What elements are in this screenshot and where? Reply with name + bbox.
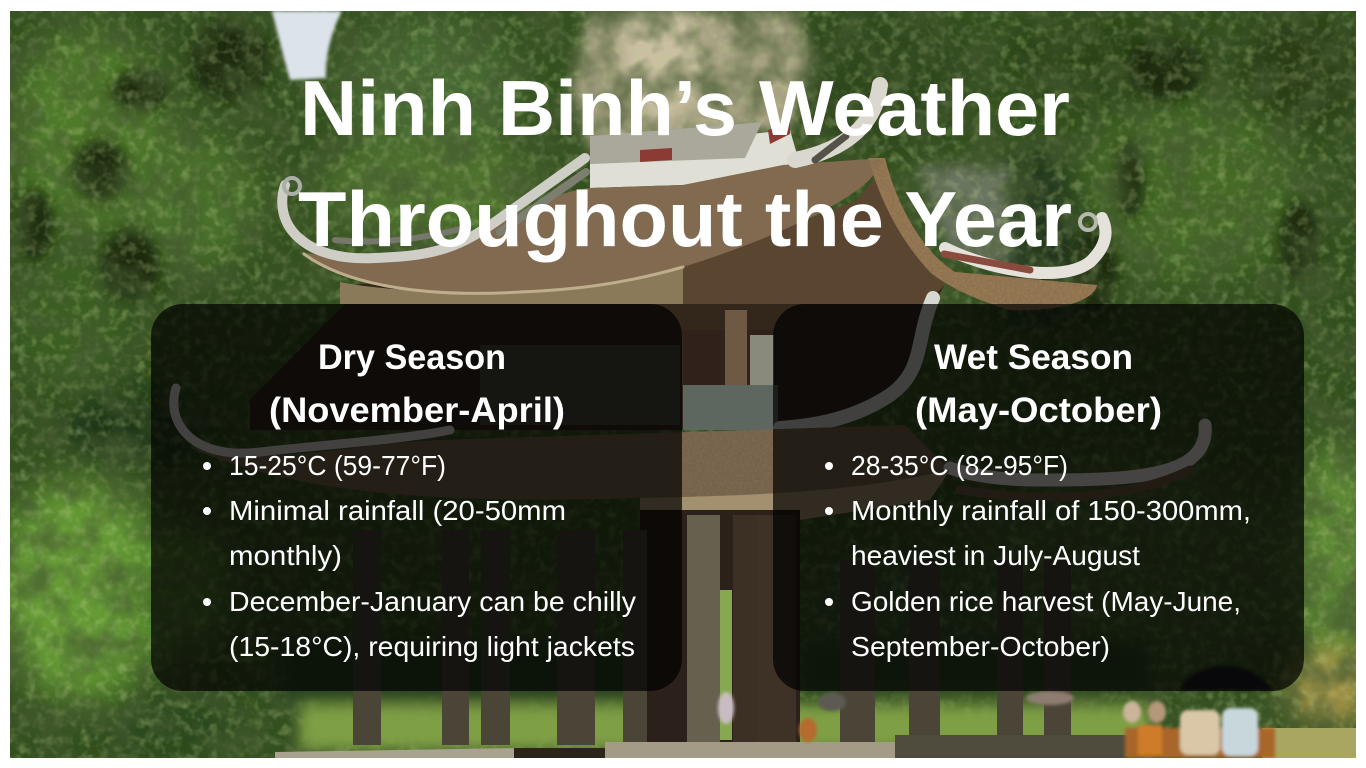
limestone cliff	[572, 11, 812, 150]
title	[298, 64, 1072, 263]
dark foliage blotches	[17, 20, 1320, 315]
sky	[272, 11, 342, 80]
roof tile texture	[565, 160, 866, 202]
upper roof fringe	[868, 158, 1097, 310]
heading: wet season: (May-October)	[915, 391, 1162, 430]
panel: wet season	[773, 304, 1304, 691]
bullet list: dry season facts: (15-18°C), requiring light jackets	[229, 631, 635, 662]
upper roof tiles	[300, 158, 885, 293]
panel: dry season	[151, 304, 682, 691]
bullet list: dry season facts: monthly)	[229, 540, 342, 571]
bullet list: dry season facts: Minimal rainfall (20-50mm	[229, 495, 566, 526]
bullet list: dry season facts: December-January can be chilly	[229, 586, 636, 617]
panel background wet	[773, 304, 1304, 691]
title: Ninh Binh’s Weather	[300, 64, 1070, 152]
bullet list: dry season facts	[203, 450, 636, 662]
bullet list: wet season facts: 28-35°C (82-95°F)	[851, 450, 1068, 481]
upper roof curled eaves	[282, 85, 1106, 428]
bullet list: dry season facts: 15-25°C (59-77°F)	[229, 450, 446, 481]
stone plinth	[275, 748, 520, 758]
heading: dry season: Dry Season	[318, 338, 506, 377]
bullet list: wet season facts	[825, 450, 1251, 662]
bullet list: wet season facts: Golden rice harvest (May-June,	[851, 586, 1241, 617]
heading: dry season: (November-April)	[269, 391, 565, 430]
garden band	[280, 640, 1150, 750]
bullet list: wet season facts: September-October)	[851, 631, 1110, 662]
upper temple wall	[250, 284, 945, 430]
bullet list: wet season facts: Monthly rainfall of 150-300mm,	[851, 495, 1251, 526]
heading: wet season: Wet Season	[934, 338, 1133, 377]
bullet list: wet season facts: heaviest in July-August	[851, 540, 1140, 571]
heading: dry season	[269, 338, 565, 430]
title: Throughout the Year	[298, 175, 1072, 263]
water	[1262, 728, 1356, 758]
columns	[353, 510, 1071, 745]
ridge panel	[590, 130, 800, 188]
panel background dry	[151, 304, 682, 691]
lower roof tiles	[185, 425, 950, 500]
heading: wet season	[915, 338, 1162, 430]
umbrella and boat tourists	[718, 666, 1275, 758]
